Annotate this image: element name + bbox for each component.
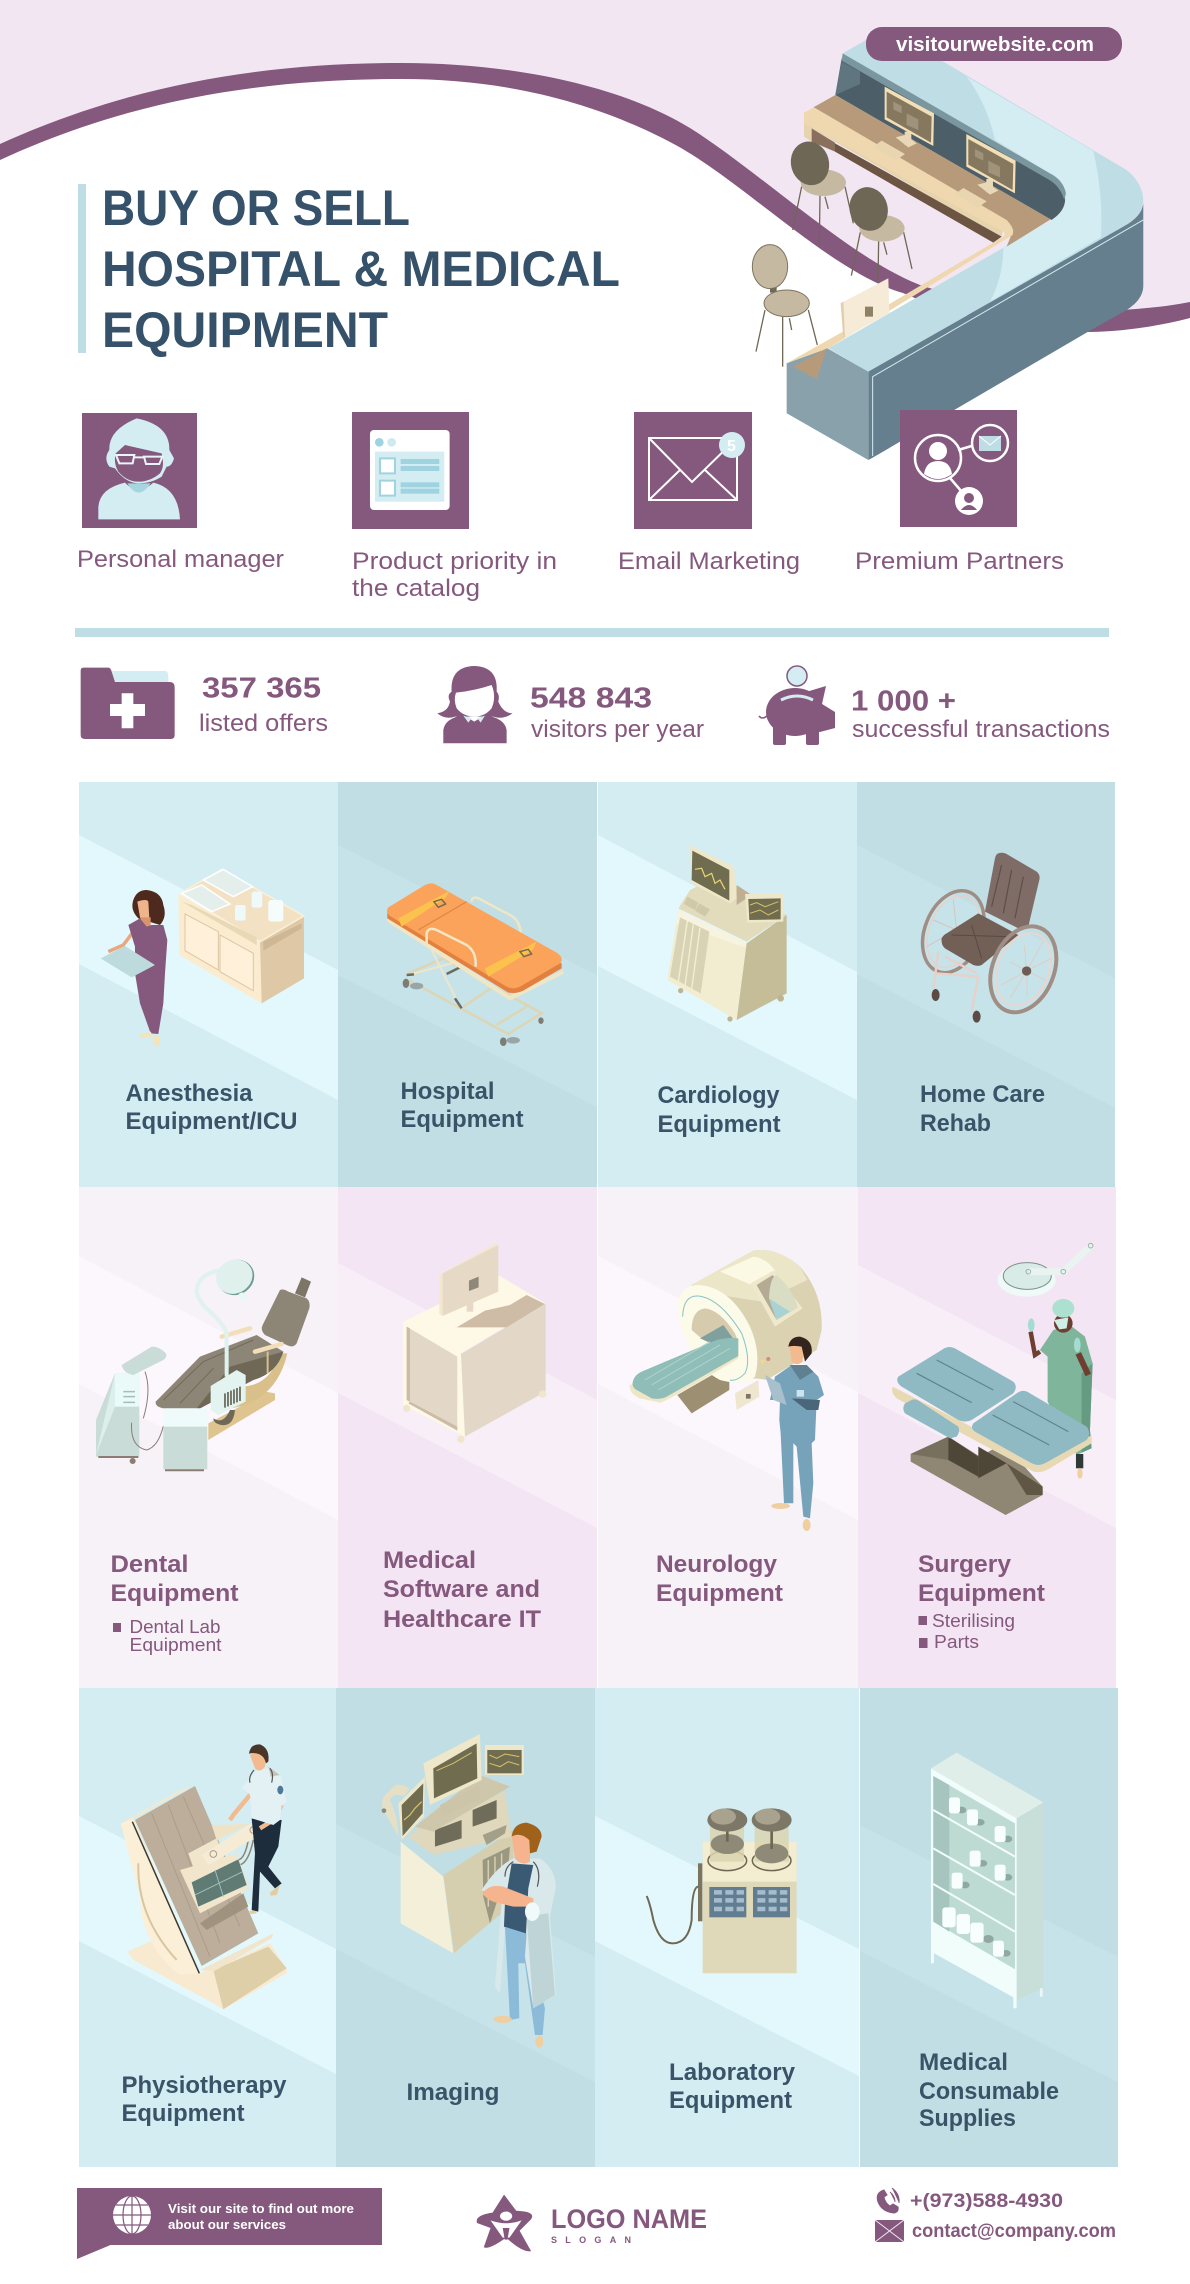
label: Medical Software: Software and bbox=[383, 1576, 540, 1603]
feature: personal manager bbox=[77, 413, 284, 573]
illustration: dental chair bbox=[96, 1253, 311, 1470]
label: Dental: Equipment bbox=[110, 1580, 239, 1607]
label: Medical Software bbox=[383, 1547, 541, 1633]
feature: email marketing bbox=[618, 412, 800, 575]
illustration: reception desk bbox=[752, 40, 1143, 460]
panel: Cardiology Equipment bbox=[598, 782, 857, 1187]
illustration: cardiology machine bbox=[667, 845, 787, 1022]
label: Surgery: Sterilising bbox=[932, 1611, 1015, 1631]
panel: Medical Software and Healthcare IT bbox=[338, 1187, 597, 1689]
label: Dental: Dental Lab bbox=[130, 1617, 220, 1637]
label: Hospital: Equipment bbox=[400, 1106, 524, 1133]
feature: product priority: the catalog bbox=[352, 575, 480, 602]
label: Dental bbox=[110, 1551, 239, 1655]
label: Surgery: Surgery bbox=[918, 1551, 1012, 1578]
callout: visit our site bbox=[77, 2188, 382, 2259]
label: Medical Consumable: Consumable bbox=[919, 2078, 1059, 2105]
illustration: medicine cabinet bbox=[931, 1753, 1043, 2008]
label: Dental: Dental bbox=[110, 1551, 188, 1578]
feature: email marketing: Email Marketing bbox=[618, 548, 800, 575]
label: Medical Software: Medical bbox=[383, 1547, 476, 1574]
stat: listed offers: 357 365 bbox=[202, 672, 321, 704]
label: Medical Software: Healthcare IT bbox=[383, 1606, 541, 1633]
panel: Medical Consumable Supplies bbox=[860, 1688, 1118, 2167]
label: Home Care bbox=[920, 1081, 1045, 1137]
label: Medical Consumable: Supplies bbox=[919, 2105, 1016, 2132]
label: Dental: Equipment bbox=[130, 1635, 222, 1655]
title: BUY OR SELL bbox=[102, 180, 410, 236]
title: EQUIPMENT bbox=[102, 302, 388, 358]
label: Medical Consumable: Medical bbox=[919, 2049, 1008, 2076]
logo: LOGO NAME bbox=[551, 2204, 707, 2234]
label: Surgery bbox=[918, 1551, 1045, 1652]
label: Hospital bbox=[400, 1078, 524, 1133]
label: Hospital: Hospital bbox=[400, 1078, 494, 1105]
illustration: computer desk bbox=[403, 1243, 546, 1443]
label: Physiotherapy: Equipment bbox=[122, 2100, 245, 2127]
panel: Dental Equipment bbox=[79, 1187, 338, 1689]
callout: visit our site: about our services bbox=[168, 2217, 286, 2232]
title: HOSPITAL & MEDICAL bbox=[102, 241, 620, 297]
stat: successful transactions: 1 000 + bbox=[851, 686, 956, 718]
label: Surgery: Parts bbox=[934, 1632, 979, 1652]
icon: phone bbox=[877, 2188, 899, 2213]
contact: phone: +(973)588-4930 bbox=[910, 2191, 1063, 2212]
label: Physiotherapy: Physiotherapy bbox=[122, 2072, 287, 2099]
label: Cardiology: Equipment bbox=[658, 1111, 781, 1138]
panel: Neurology Equipment bbox=[598, 1187, 858, 1689]
illustration: MRI scanner and doctor bbox=[630, 1250, 824, 1531]
contact: phone bbox=[877, 2188, 1063, 2213]
feature: product priority bbox=[352, 412, 557, 602]
label: Neurology bbox=[656, 1551, 783, 1607]
logo bbox=[477, 2195, 707, 2251]
logo: SLOGAN bbox=[551, 2235, 631, 2245]
panel: Hospital Equipment bbox=[338, 782, 597, 1187]
label: Cardiology bbox=[658, 1082, 781, 1138]
stat: visitors per year: visitors per year bbox=[531, 716, 704, 743]
website pill bbox=[866, 27, 1122, 61]
label: Cardiology: Cardiology bbox=[658, 1082, 780, 1109]
stat: visitors per year: 548 843 bbox=[530, 682, 652, 714]
website pill: visitourwebsite.com bbox=[896, 34, 1094, 56]
illustration: imaging console and doctor bbox=[382, 1734, 556, 2048]
label: Anesthesia bbox=[126, 1080, 298, 1135]
label: Laboratory: Equipment bbox=[669, 2087, 792, 2114]
label: Neurology: Neurology bbox=[656, 1551, 778, 1578]
panel: Laboratory Equipment bbox=[595, 1688, 859, 2167]
icon: globe bbox=[113, 2196, 151, 2234]
feature: product priority: Product priority in bbox=[352, 548, 557, 575]
label: Home Care: Rehab bbox=[920, 1110, 991, 1137]
stat: successful transactions: successful transactions bbox=[852, 716, 1110, 743]
stat: listed offers bbox=[81, 668, 328, 739]
label: Laboratory: Laboratory bbox=[669, 2059, 796, 2086]
label: Laboratory bbox=[669, 2059, 796, 2114]
label: Anesthesia: Anesthesia bbox=[126, 1080, 253, 1107]
panel: Imaging bbox=[336, 1688, 595, 2167]
feature: premium partners bbox=[855, 410, 1064, 575]
label: Neurology: Equipment bbox=[656, 1580, 783, 1607]
illustration: physiotherapy machine and therapist bbox=[121, 1744, 287, 2009]
panel: Physiotherapy Equipment bbox=[79, 1688, 336, 2167]
icon: envelope bbox=[875, 2220, 904, 2242]
label: Surgery: Equipment bbox=[918, 1580, 1045, 1607]
panel: Anesthesia Equipment/ICU bbox=[79, 782, 338, 1187]
stat: successful transactions bbox=[759, 666, 1110, 745]
label: Imaging: Imaging bbox=[406, 2079, 500, 2106]
panel: Home Care Rehab bbox=[857, 782, 1115, 1187]
panel: Surgery Equipment bbox=[858, 1187, 1116, 1689]
label: Anesthesia: Equipment/ICU bbox=[126, 1108, 298, 1135]
stat: listed offers: listed offers bbox=[199, 710, 328, 737]
illustration: nurse and cabinet bbox=[101, 869, 304, 1046]
illustration: operating table and surgeon bbox=[892, 1243, 1093, 1515]
feature: email marketing: 5 bbox=[727, 438, 736, 455]
contact: email: contact@company.com bbox=[912, 2221, 1116, 2242]
stat: visitors per year bbox=[437, 666, 704, 743]
label: Medical Consumable bbox=[919, 2049, 1059, 2132]
label: Home Care: Home Care bbox=[920, 1081, 1045, 1108]
feature: premium partners: Premium Partners bbox=[855, 548, 1064, 575]
illustration: stretcher bbox=[387, 883, 563, 1046]
label: Physiotherapy bbox=[122, 2072, 287, 2127]
callout: visit our site: Visit our site to find out more bbox=[168, 2201, 354, 2216]
feature: personal manager: Personal manager bbox=[77, 546, 284, 573]
title bbox=[78, 180, 620, 358]
divider bbox=[75, 628, 1109, 637]
illustration: laboratory unit bbox=[647, 1808, 797, 1973]
illustration: wheelchair bbox=[911, 853, 1068, 1023]
